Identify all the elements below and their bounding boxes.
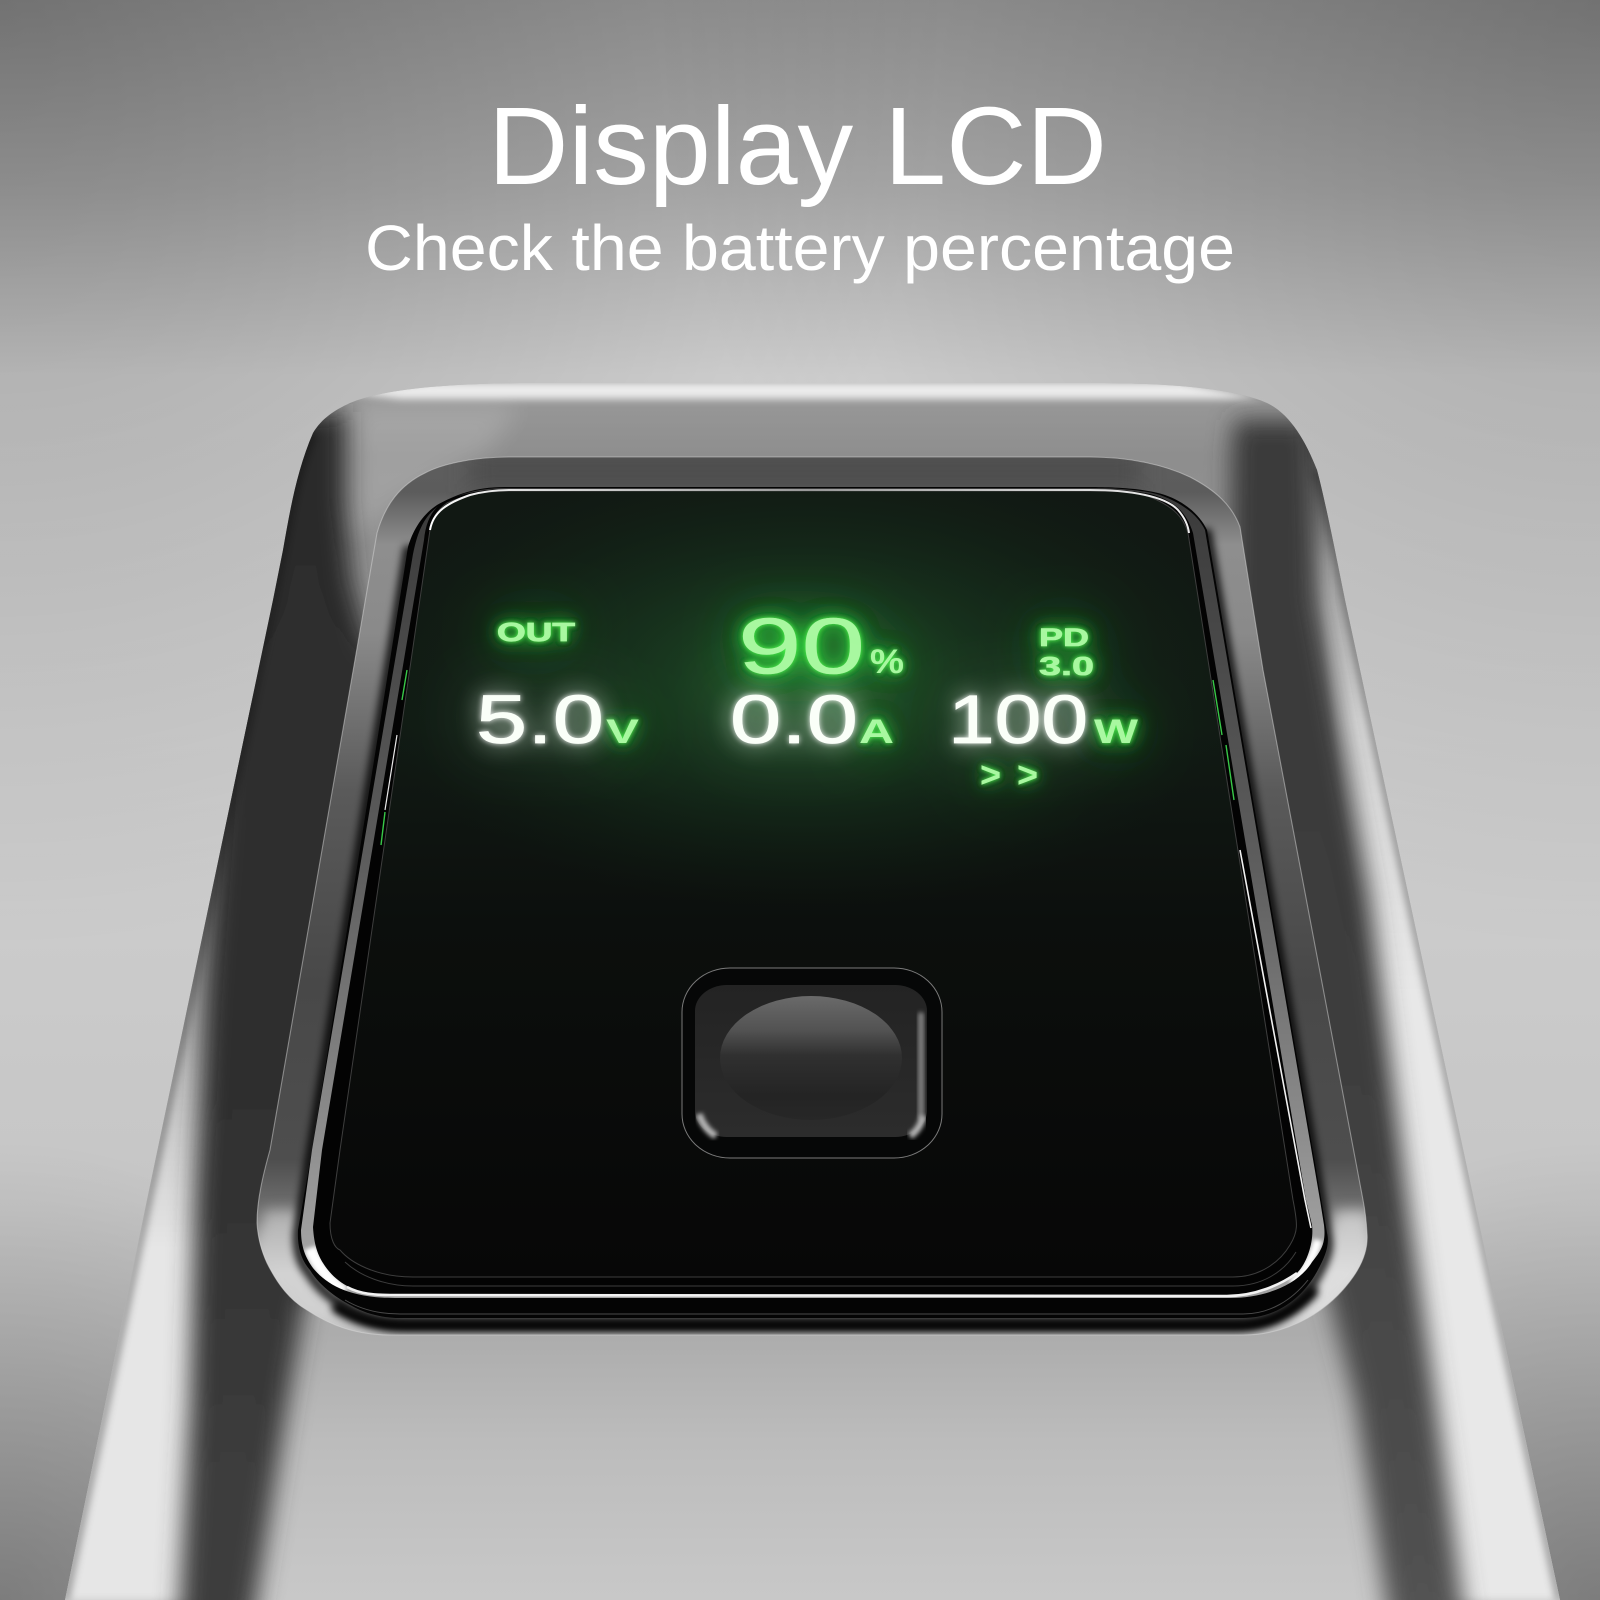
right highlight: [918, 1012, 924, 1120]
right edge highlight: [1299, 434, 1560, 1600]
current value: 0.0: [730, 681, 858, 758]
title: Display LCD: [488, 85, 1107, 208]
output arrows: >>: [980, 754, 1038, 795]
button face: [695, 985, 927, 1137]
button dome: [720, 996, 902, 1120]
screen: [300, 440, 1300, 1286]
inner black ring: [313, 489, 1312, 1296]
bezel top shade: [468, 458, 1142, 488]
recess ring: [298, 487, 1328, 1318]
battery percentage: 90: [738, 601, 865, 690]
bezel lower right light: [1261, 1202, 1368, 1333]
left edge highlight: [65, 700, 252, 1600]
bezel bottom shadow: [338, 1292, 1312, 1326]
screen green glow: [494, 516, 1114, 850]
watt unit: W: [1094, 713, 1139, 751]
bezel outline: [257, 457, 1367, 1335]
OUT label: OUT: [497, 617, 575, 647]
PD label: PD: [1039, 624, 1089, 652]
subtitle: Check the battery percentage: [365, 212, 1235, 284]
volt unit: V: [606, 713, 639, 751]
recess shadow: [298, 534, 1328, 1322]
device body: [0, 370, 1600, 1600]
display bezel: [250, 450, 1375, 1335]
3.0 label: 3.0: [1039, 651, 1094, 681]
lcd readout: white values: [476, 681, 1088, 758]
screen top glint: [430, 490, 1189, 533]
right green reflection: [1213, 680, 1234, 800]
power value: 100: [948, 681, 1088, 758]
bezel lower left light: [257, 1202, 358, 1330]
top rim highlight: [345, 382, 1262, 399]
silver inner wall: [301, 488, 1324, 1298]
right dark reflection: [1230, 420, 1468, 1600]
screen second edge line: [345, 1252, 1296, 1286]
thin lines on recess floor: [345, 1280, 1308, 1314]
lower right highlight: [910, 1116, 923, 1136]
lower left highlight: [699, 1114, 716, 1136]
power button: [682, 968, 942, 1158]
voltage value: 5.0: [476, 681, 604, 758]
right side white glint: [1240, 850, 1311, 1228]
amp unit: A: [859, 713, 894, 751]
bottom white glint: [347, 1273, 1297, 1296]
top-left soft reflection: [352, 406, 506, 524]
left side white glint: [385, 735, 397, 810]
left green reflection: [381, 670, 407, 845]
lcd readout: green labels: [497, 601, 1139, 795]
percent sign: %: [870, 643, 904, 681]
body edge line: [65, 433, 1560, 1600]
corner glint right: [1292, 1240, 1318, 1284]
corner glint left: [310, 1248, 344, 1292]
button surround: [682, 968, 942, 1158]
left dark reflection: [178, 412, 400, 1600]
